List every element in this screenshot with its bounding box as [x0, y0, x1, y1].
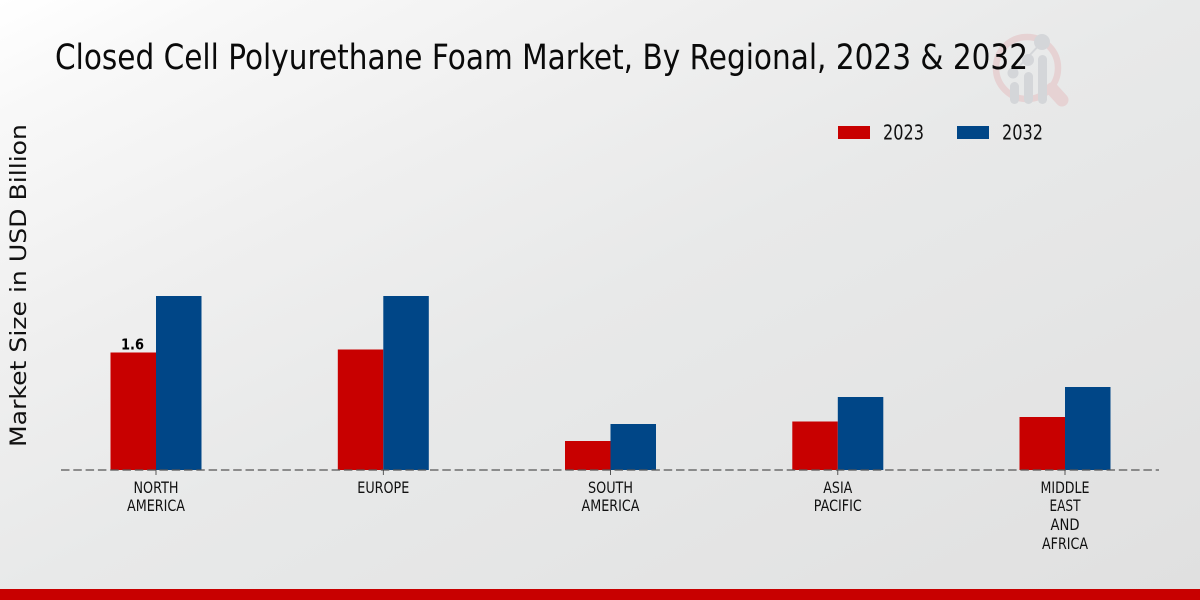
category label: South America: SOUTH: [588, 478, 633, 497]
category label: South America: [582, 478, 640, 515]
category label: South America: AMERICA: [582, 496, 640, 515]
x-axis baseline: [61, 469, 1159, 471]
category label: Europe: EUROPE: [357, 478, 409, 497]
category label: Middle East and Africa: AND: [1050, 515, 1080, 534]
bars: North America: [110, 296, 202, 470]
legend item: 2032: [957, 120, 1043, 144]
category label: Middle East and Africa: EAST: [1050, 496, 1081, 515]
category label: Asia Pacific: PACIFIC: [814, 496, 862, 515]
legend item: 2023: 2023: [883, 120, 924, 144]
bars: Europe: [338, 296, 429, 470]
category label: Asia Pacific: ASIA: [823, 478, 852, 497]
legend item: 2023: [838, 120, 924, 144]
footer bar: [0, 589, 1200, 600]
category label: North America: NORTH: [134, 478, 178, 497]
legend: [838, 120, 1043, 144]
bars: South America: [565, 424, 656, 470]
category label: North America: AMERICA: [127, 496, 185, 515]
data label: 1.6: 1.6: [121, 336, 144, 354]
bars: Asia Pacific: [792, 397, 883, 470]
legend item: 2032: 2032: [1002, 120, 1043, 144]
category label: Middle East and Africa: AFRICA: [1042, 534, 1088, 553]
y-axis label: Market Size in USD Billion: [6, 124, 32, 447]
category label: Middle East and Africa: [1040, 478, 1090, 553]
bars: Middle East and Africa: [1020, 387, 1110, 470]
category label: Asia Pacific: [814, 478, 862, 515]
bar chart: [61, 296, 1159, 553]
category label: Middle East and Africa: MIDDLE: [1040, 478, 1090, 497]
category label: North America: [127, 478, 185, 515]
title: Closed Cell Polyurethane Foam Market, By Regional, 2023 & 2032: [55, 38, 1028, 78]
icon: watermark magnifier with bars: [996, 34, 1062, 104]
